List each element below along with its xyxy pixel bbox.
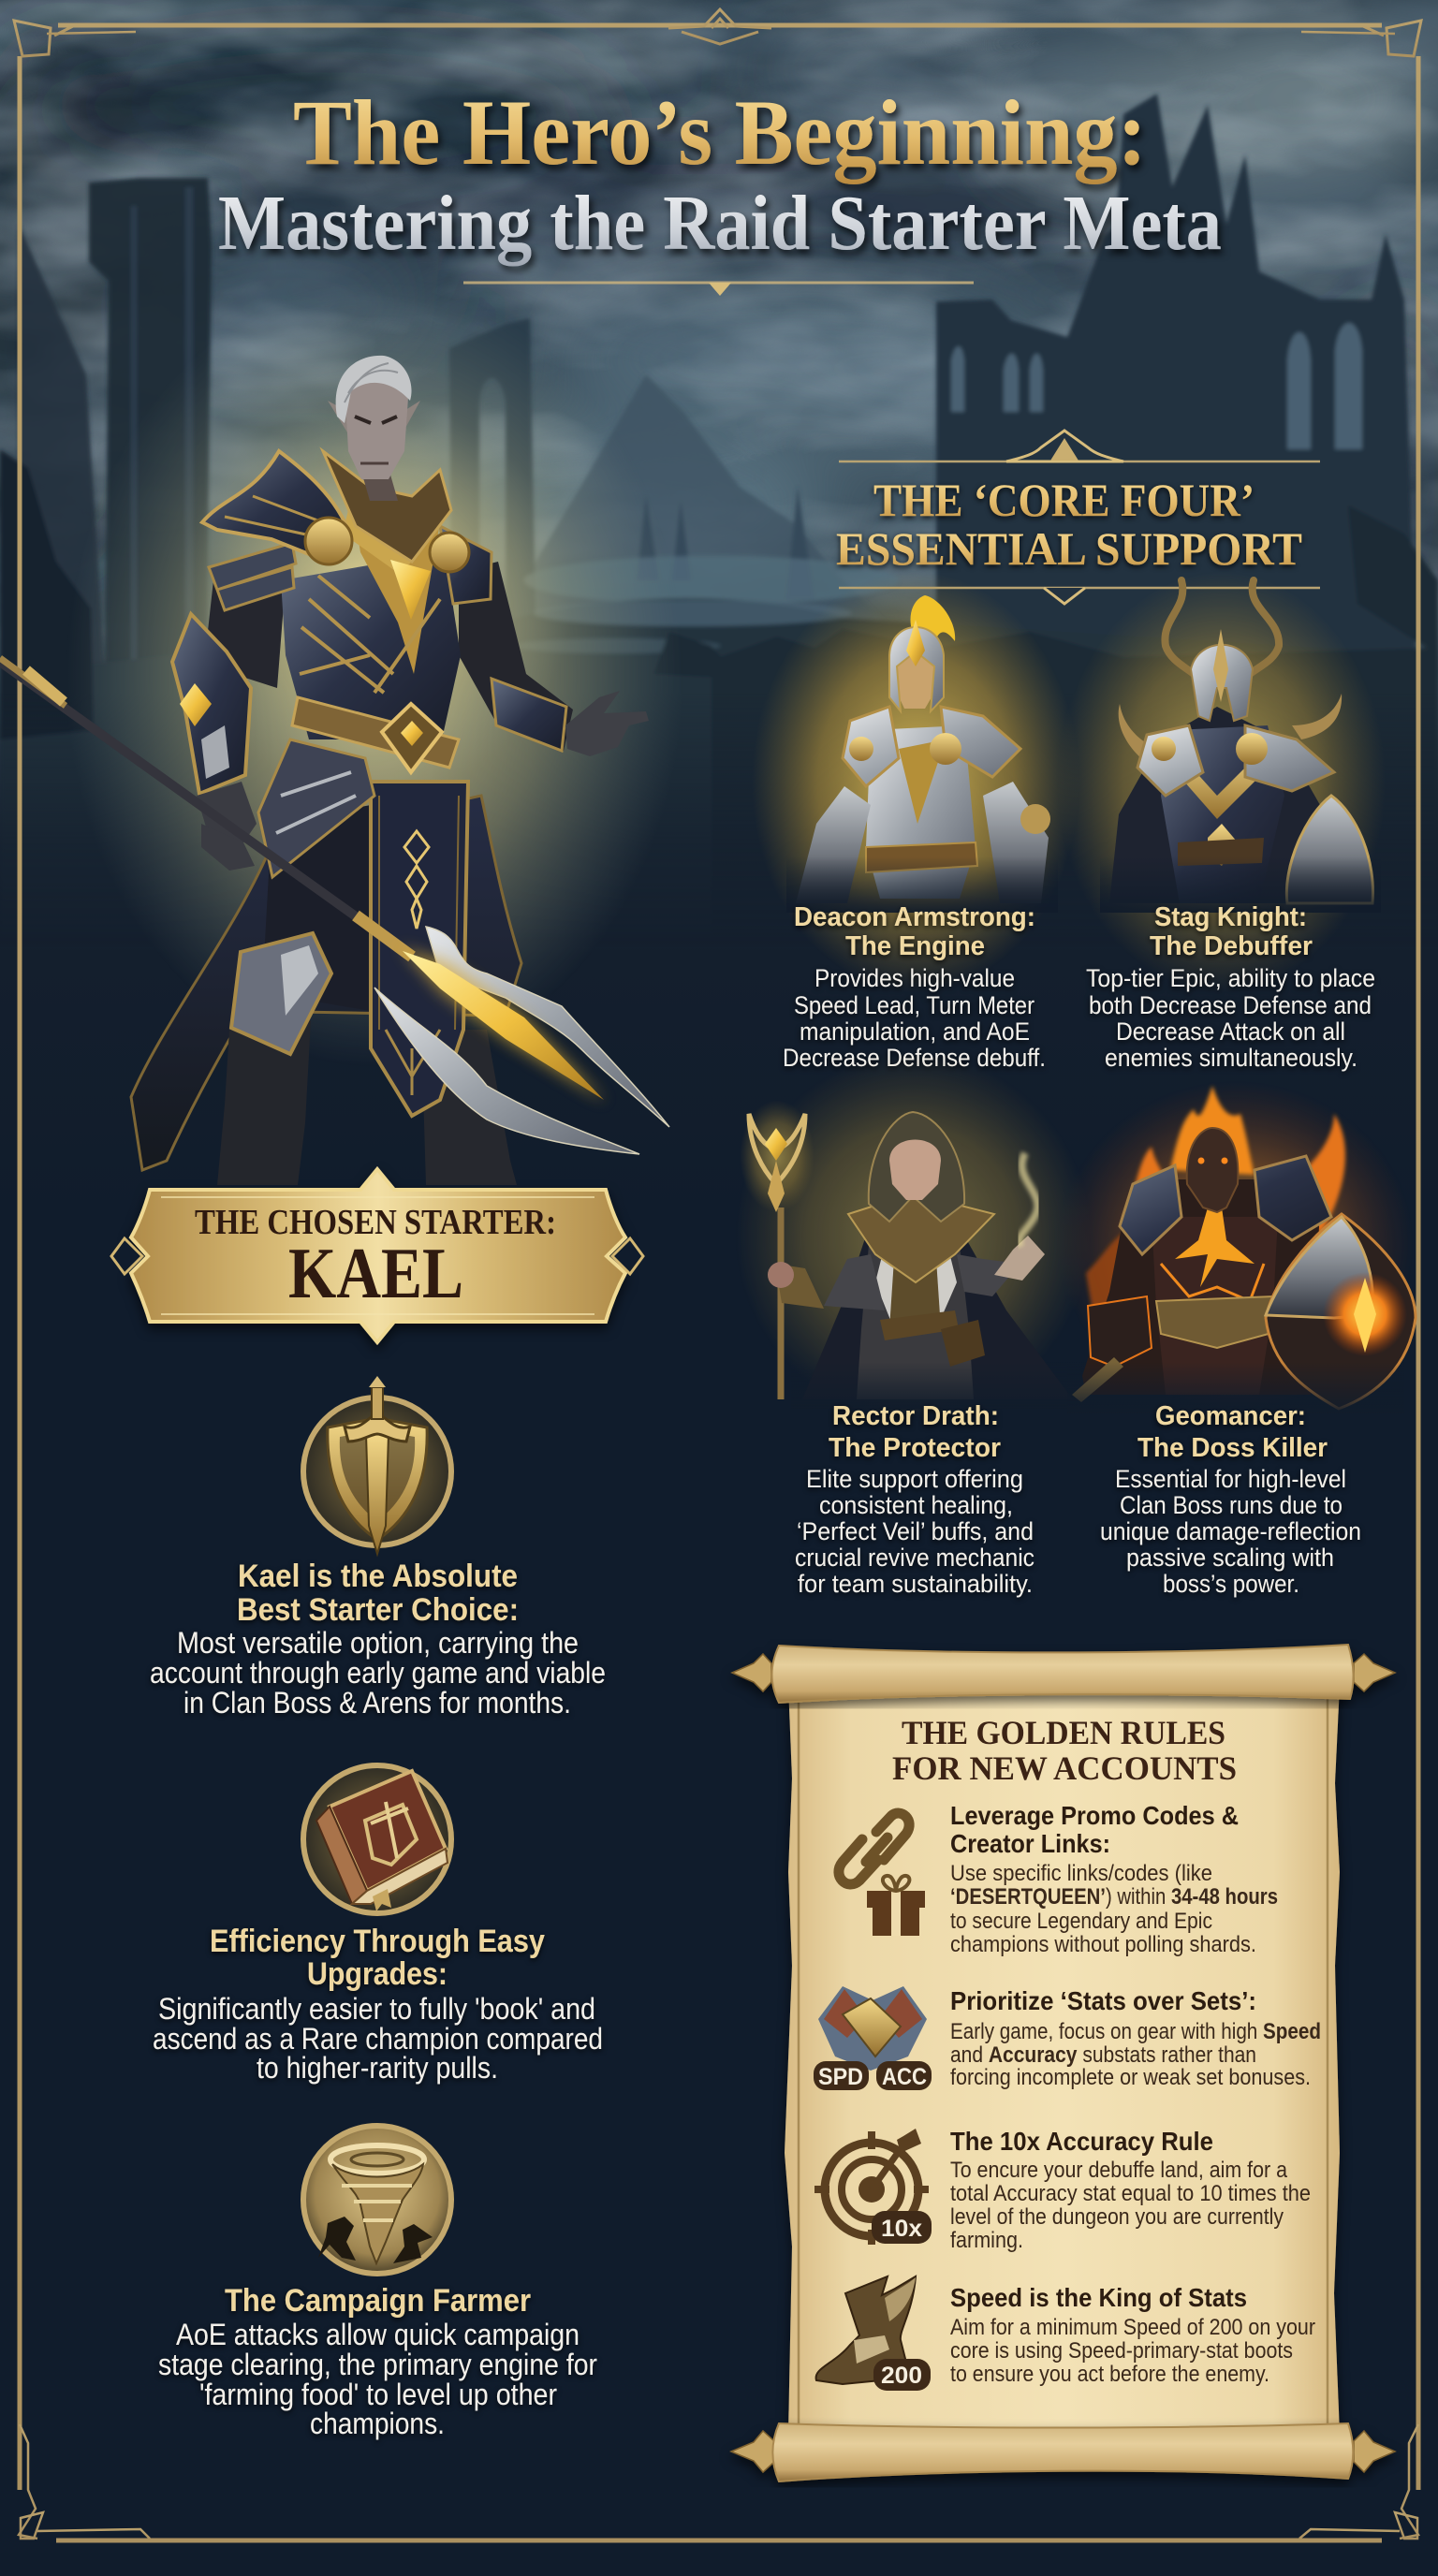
hero left arm [172,580,286,856]
rule 3 text: The 10x Accuracy Rule [950,2127,1213,2156]
rule 2 text: forcing incomplete or weak set bonuses. [950,2065,1311,2090]
text: Deacon Armstrong: Decrease Defense debuff. [783,1044,1046,1072]
character: Deacon Armstrong [752,571,1079,992]
rule 2 text [950,1986,1321,2090]
text: Geomancer: Geomancer: [1155,1401,1306,1431]
character: Rector Drath [735,1053,1091,1418]
icon: target with 10x badge [814,2129,932,2245]
scroll heading [892,1714,1237,1787]
section heading: core four [836,431,1320,604]
text: Rector Drath: The Protector [829,1433,1001,1463]
text: Rector Drath: Elite support offering [806,1465,1023,1493]
text: Geomancer: Clan Boss runs due to [1120,1491,1343,1519]
text: Geomancer: Essential for high-level [1115,1465,1346,1493]
feature 1 text: Kael is the Absolute [238,1559,518,1594]
rule 3 text: level of the dungeon you are currently [950,2204,1284,2230]
rule 3: 10x accuracy [814,2127,1311,2253]
text: Stag Knight: Top-tier Epic, ability to place [1086,964,1375,992]
hero shoulders and head [202,356,492,610]
hero legs [217,805,517,1185]
feature 2 text: Significantly easier to fully 'book' and [158,1992,595,2026]
text: Rector Drath: crucial revive mechanic [795,1544,1034,1572]
hero coat [131,796,521,1170]
rule 3 text [950,2127,1311,2253]
feature 1 text [150,1559,606,1720]
icon: gear badges SPD ACC: ACC [882,2064,927,2090]
text: Stag Knight: enemies simultaneously. [1105,1044,1357,1072]
background: stormy ruins fading to navy [0,0,1438,863]
rule 1 text: to secure Legendary and Epic [950,1909,1212,1934]
text: Deacon Armstrong: Provides high-value [814,964,1015,992]
scroll heading: FOR NEW ACCOUNTS [892,1749,1237,1787]
title line 2: Mastering the Raid Starter Meta [218,180,1222,267]
hero torso [258,510,461,877]
feature 2: easy upgrades [153,1765,603,2085]
icon: tornado [303,2126,451,2274]
text: Stag Knight: both Decrease Defense and [1089,991,1372,1019]
scroll paper [785,1685,1340,2434]
banner name: KAEL [288,1233,463,1313]
hero tabard [371,782,468,1116]
feature 2 text: Upgrades: [307,1956,448,1992]
icon: gear badges SPD ACC [814,1986,932,2090]
rule 2 text: Prioritize ‘Stats over Sets’: [950,1986,1256,2015]
banner line 1: THE CHOSEN STARTER: [195,1203,556,1242]
rule 1 text: Use specific links/codes (like [950,1861,1212,1886]
rule 1: promo codes [839,1801,1278,1957]
text: Stag Knight: The Debuffer [1150,931,1313,961]
text: Rector Drath: ‘Perfect Veil’ buffs, and [797,1517,1034,1545]
rule 2 text: and Accuracy substats rather than [950,2042,1256,2068]
text: Stag Knight: Stag Knight: [1154,902,1307,932]
icon: skill book [303,1765,451,1913]
feature 2 text: to higher-rarity pulls. [257,2051,498,2085]
heading text: THE ‘CORE FOUR’ [873,474,1255,526]
rule 2: stats over sets [814,1986,1321,2090]
rule 4 text: to ensure you act before the enemy. [950,2362,1269,2387]
rule 4 text [950,2283,1315,2387]
rule 1 text: champions without polling shards. [950,1932,1256,1957]
hero illustration: Kael [0,281,683,1185]
text: Geomancer: The Doss Killer [1137,1433,1328,1463]
text: Geomancer: passive scaling with [1126,1544,1334,1572]
text: Rector Drath [795,1401,1034,1598]
feature 3 text: 'farming food' to level up other [199,2378,557,2411]
title divider ornament [463,283,974,296]
text: Geomancer: unique damage-reflection [1100,1517,1361,1545]
feature 1 text: account through early game and viable [150,1656,606,1690]
rule 4 text: Aim for a minimum Speed of 200 on your [950,2315,1315,2340]
icon: chain link and gift [839,1813,925,1936]
icon: sword and shield [303,1376,451,1554]
rule 3 text: total Accuracy stat equal to 10 times the [950,2181,1311,2206]
text: Deacon Armstrong [783,902,1046,1072]
rule 4 text: Speed is the King of Stats [950,2283,1247,2312]
feature 1 text: in Clan Boss & Arens for months. [183,1686,571,1720]
hero spear [0,658,669,1154]
scroll bottom roller [731,2423,1395,2481]
feature 1 text: Best Starter Choice: [237,1592,519,1628]
scroll heading: THE GOLDEN RULES [902,1714,1225,1751]
text: Deacon Armstrong: The Engine [845,931,985,961]
rule 3 text: farming. [950,2228,1023,2253]
feature 1 text: Most versatile option, carrying the [177,1626,579,1660]
icon: target with 10x badge: 10x [881,2216,922,2242]
feature 1: absolute best starter [150,1376,606,1720]
heading text [836,474,1302,575]
feature 3 text: AoE attacks allow quick campaign [176,2318,580,2351]
heading text: ESSENTIAL SUPPORT [836,522,1302,575]
rule 3 text: To encure your debuffe land, aim for a [950,2158,1287,2183]
feature 3 text: The Campaign Farmer [225,2283,531,2319]
text: Geomancer [1100,1401,1361,1598]
text: Stag Knight [1086,902,1375,1072]
title line 1: The Hero’s Beginning: [293,80,1147,184]
title [218,80,1222,267]
feature 2 text: Efficiency Through Easy [210,1924,545,1959]
rule 2 text: Early game, focus on gear with high Speed [950,2019,1321,2044]
feature 3 text: stage clearing, the primary engine for [158,2348,597,2381]
character: Stag Knight [1058,571,1386,992]
rule 4 text: core is using Speed-primary-stat boots [950,2338,1293,2364]
icon: winged boot with 200 badge [816,2276,931,2391]
hero right arm [459,562,649,756]
text: Deacon Armstrong: Deacon Armstrong: [794,902,1035,932]
text: Rector Drath: Rector Drath: [832,1401,999,1431]
feature 3: campaign farmer [158,2126,597,2440]
rule 4: speed [816,2276,1315,2391]
text: Rector Drath: for team sustainability. [798,1570,1033,1598]
feature 2 text [153,1924,603,2085]
feature 3 text: champions. [310,2407,445,2440]
rule 1 text: Leverage Promo Codes & [950,1801,1239,1830]
rule 1 text: Creator Links: [950,1829,1110,1858]
panel: golden rules scroll [731,1645,1395,2481]
character: Geomancer [1058,1081,1416,1413]
rule 1 text [950,1801,1278,1957]
icon: winged boot with 200 badge: 200 [881,2363,922,2389]
text: Geomancer: boss’s power. [1163,1570,1299,1598]
feature 3 text [158,2283,597,2440]
text: Deacon Armstrong: manipulation, and AoE [800,1017,1030,1046]
feature 2 text: ascend as a Rare champion compared [153,2022,603,2056]
text: Deacon Armstrong: Speed Lead, Turn Meter [794,991,1034,1019]
text: Rector Drath: consistent healing, [819,1491,1013,1519]
icon: gear badges SPD ACC: SPD [818,2064,863,2090]
rule 1 text: ‘DESERTQUEEN’) within 34-48 hours [950,1884,1278,1910]
text: Stag Knight: Decrease Attack on all [1116,1017,1345,1046]
banner: the chosen starter [111,1169,643,1342]
scroll top roller [732,1645,1395,1703]
